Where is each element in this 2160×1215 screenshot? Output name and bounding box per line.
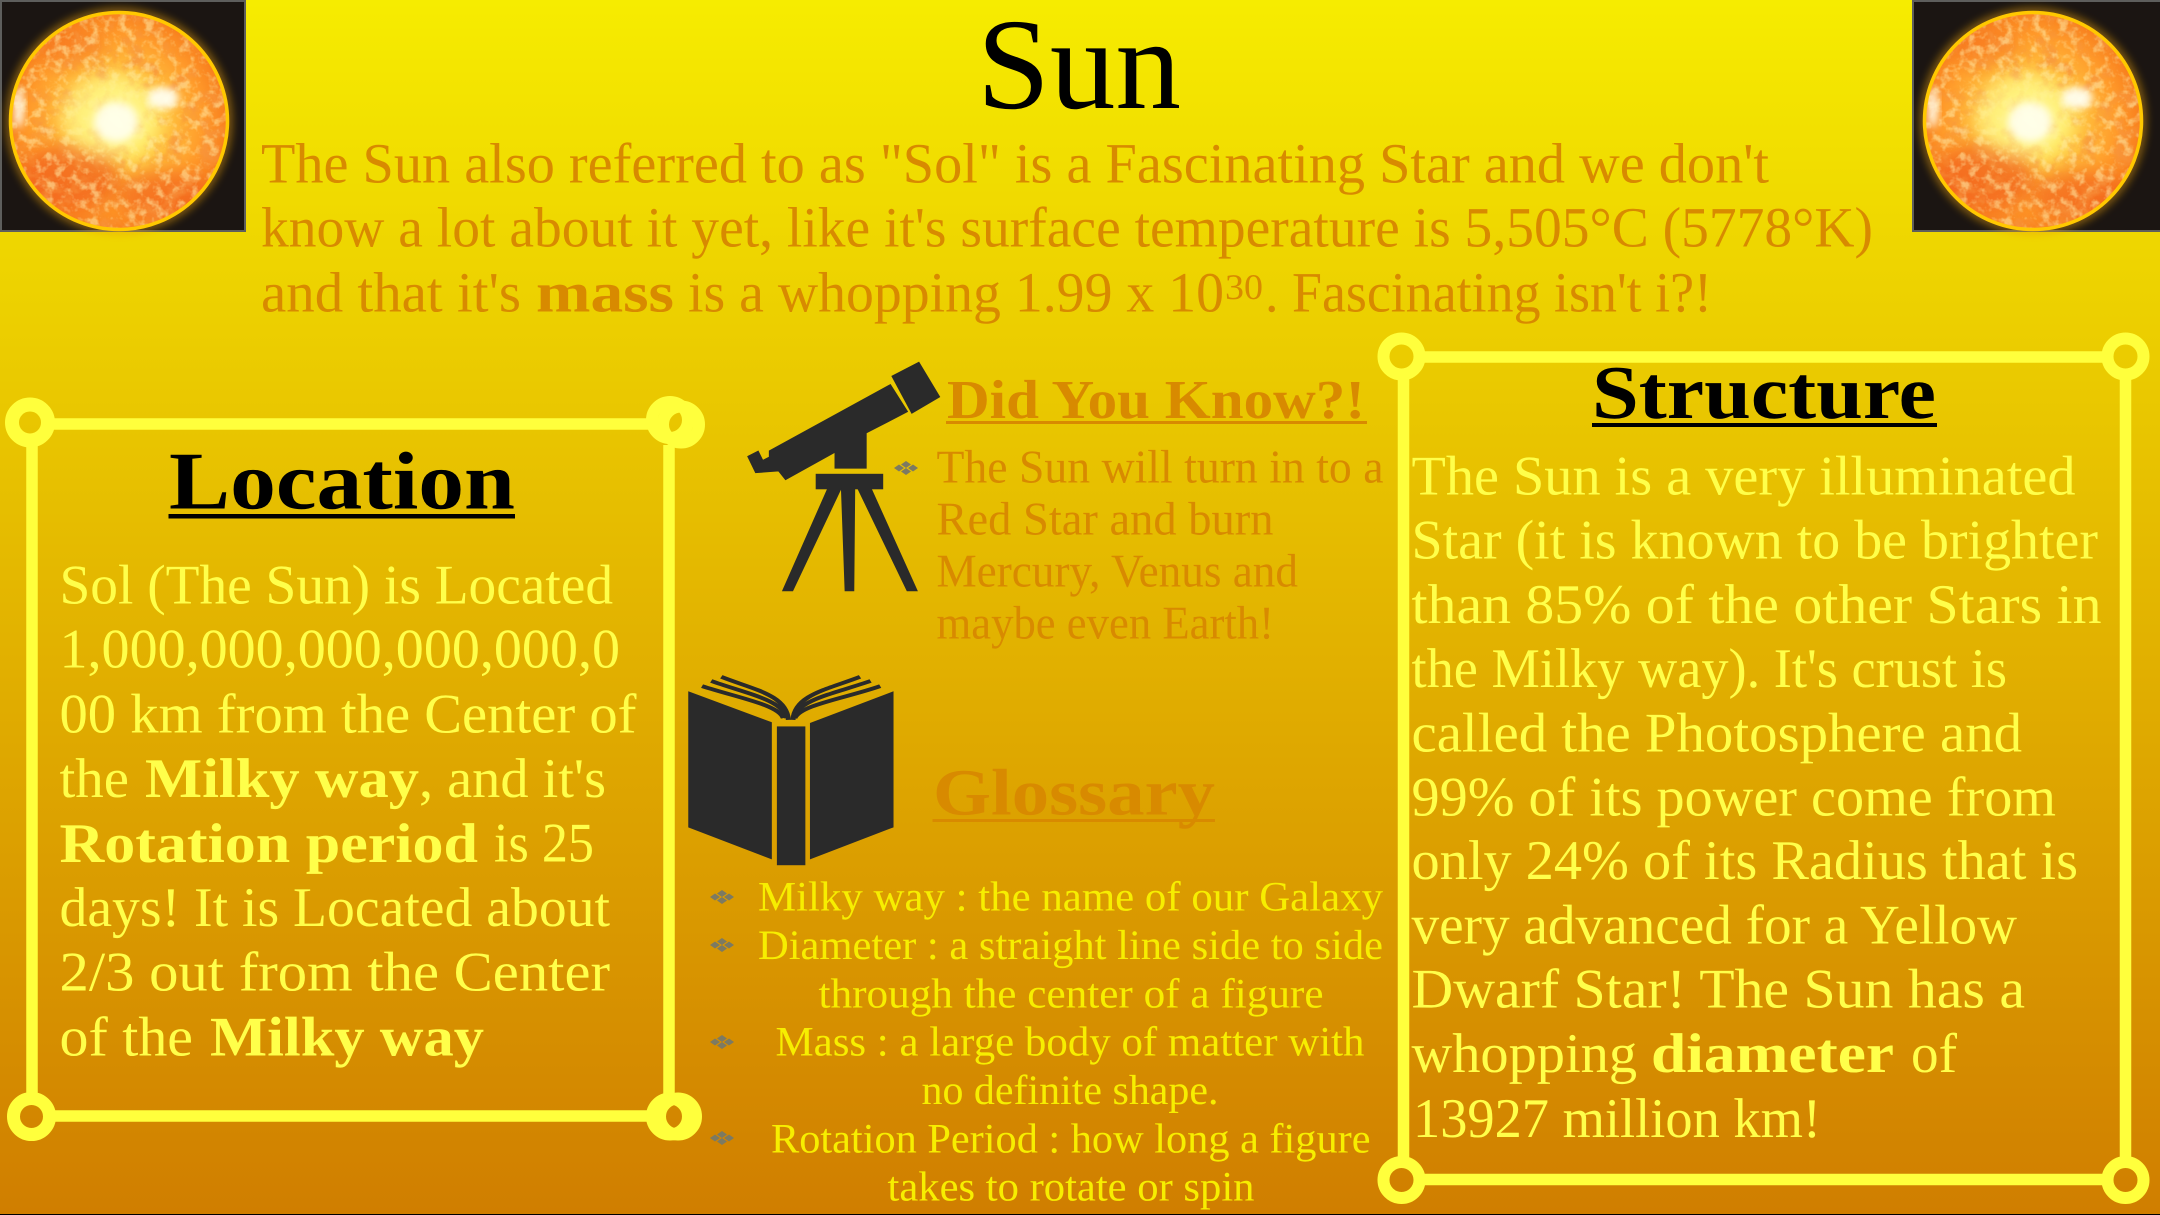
structure heading: Structure — [1592, 351, 1936, 435]
structure body text: Dwarf Star! The Sun has a — [1412, 958, 2025, 1020]
glossary text: Diameter : a straight line side to side — [758, 923, 1383, 969]
panel: glossary — [710, 756, 1383, 1210]
glossary text — [758, 874, 1383, 1210]
did you know text: Mercury, Venus and — [936, 546, 1298, 598]
intro text block — [261, 132, 1873, 324]
location body text: Sol (The Sun) is Located — [60, 554, 613, 616]
structure body text: than 85% of the other Stars in — [1412, 574, 2102, 636]
panel: location — [12, 402, 699, 1134]
location body text: of the — [60, 1006, 193, 1068]
structure body text: Star (it is known to be brighter — [1412, 510, 2098, 572]
location body text: 2/3 out from the Center — [60, 942, 610, 1004]
location body text: Milky way — [210, 1006, 484, 1068]
structure body text — [1412, 446, 2102, 1150]
intro text block: . Fascinating isn't i?! — [1265, 262, 1712, 324]
location body text — [60, 554, 637, 1068]
panel: did you know — [894, 369, 1384, 650]
structure body text: only 24% of its Radius that is — [1412, 830, 2078, 892]
location frame — [12, 402, 699, 1134]
location body text: Milky way — [145, 748, 419, 810]
glossary text: Mass : a large body of matter with — [776, 1020, 1364, 1066]
location heading: Location — [169, 436, 515, 526]
icon: telescope — [748, 362, 939, 591]
did you know text — [936, 442, 1384, 650]
glossary text: Rotation Period : how long a figure — [771, 1116, 1370, 1162]
icon: book — [688, 677, 894, 865]
structure body text: whopping — [1412, 1023, 1637, 1085]
structure body text: the Milky way). It's crust is — [1412, 638, 2007, 700]
location body text: 00 km from the Center of — [60, 684, 637, 746]
did you know text: The Sun will turn in to a — [936, 442, 1384, 494]
panel: structure — [1384, 338, 2144, 1198]
location body text: the — [60, 748, 129, 810]
structure body text: The Sun is a very illuminated — [1412, 446, 2076, 508]
intro text block: mass — [536, 262, 674, 324]
glossary text: no definite shape. — [922, 1068, 1218, 1114]
intro text block: 30 — [1225, 267, 1263, 307]
image: sun left — [0, 0, 245, 235]
glossary heading: Glossary — [933, 756, 1215, 830]
did you know text: Red Star and burn — [936, 494, 1274, 546]
structure body text: of — [1911, 1023, 1957, 1085]
glossary text: Milky way : the name of our Galaxy — [758, 874, 1383, 920]
image: sun right — [1913, 0, 2160, 235]
structure body text: 99% of its power come from — [1412, 766, 2056, 828]
intro text block: The Sun also referred to as "Sol" is a Fascinating Star and we don't — [261, 132, 1769, 196]
location body text: days! It is Located about — [60, 877, 610, 939]
intro text block: is a whopping 1.99 x 10 — [688, 262, 1224, 324]
intro text block: know a lot about it yet, like it's surface temperature is 5,505°C (5778°K) — [261, 196, 1873, 260]
intro text block: and that it's — [261, 262, 521, 324]
location body text: 1,000,000,000,000,000,0 — [60, 618, 620, 680]
structure body text: diameter — [1651, 1023, 1894, 1085]
location body text: is 25 — [494, 812, 594, 874]
did you know heading: Did You Know?! — [947, 369, 1365, 430]
structure body text: called the Photosphere and — [1412, 702, 2022, 764]
location body text: , and it's — [419, 748, 606, 810]
glossary text: takes to rotate or spin — [888, 1164, 1254, 1210]
location body text: Rotation period — [60, 813, 478, 875]
glossary bullets — [710, 890, 734, 1145]
did you know text: maybe even Earth! — [936, 598, 1274, 650]
structure frame — [1384, 338, 2144, 1198]
structure body text: 13927 million km! — [1413, 1088, 1821, 1150]
bullet — [894, 461, 918, 475]
glossary text: through the center of a figure — [818, 972, 1324, 1018]
structure body text: very advanced for a Yellow — [1412, 894, 2018, 956]
